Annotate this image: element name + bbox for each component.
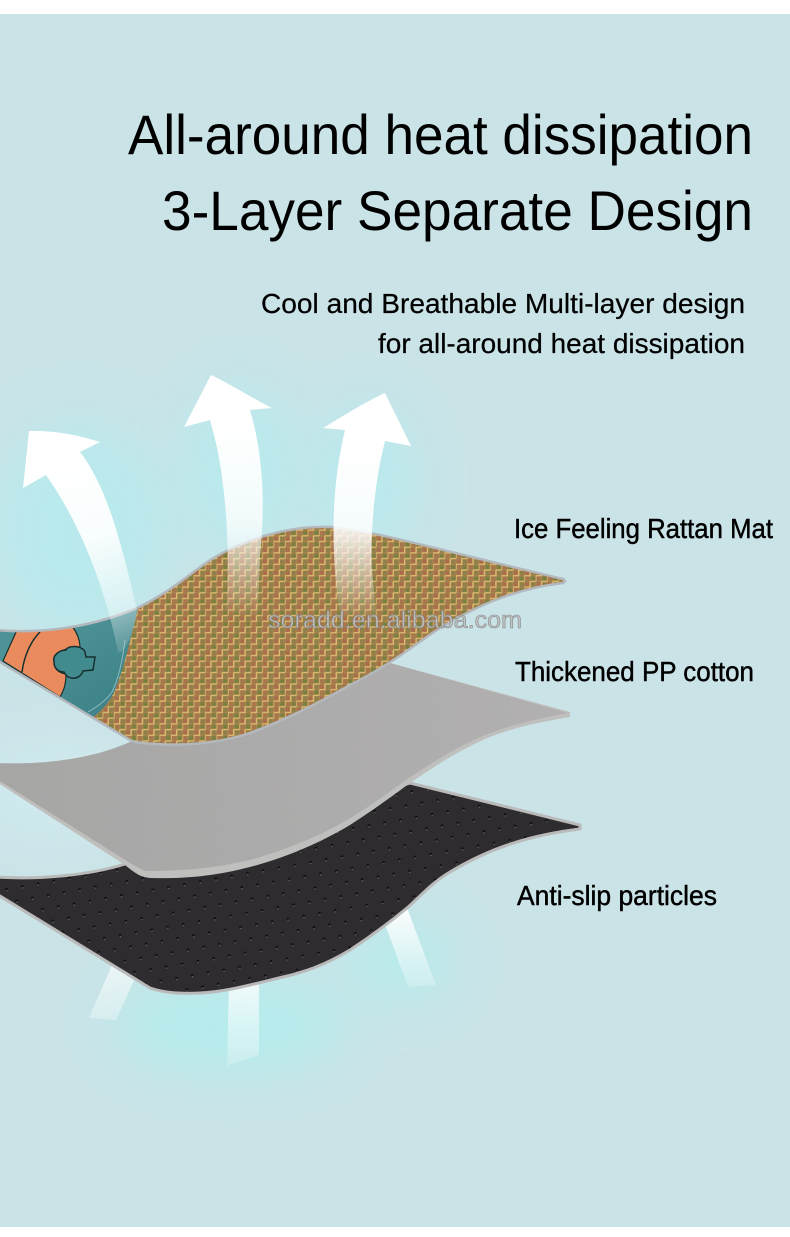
- rising heat arrow middle: [184, 375, 272, 615]
- lower escaping heat arrows: [89, 905, 436, 1066]
- title: 3-Layer Separate Design: [162, 180, 753, 242]
- teal cloud badge: [54, 646, 95, 678]
- rising heat arrow left: [23, 431, 137, 652]
- layer: thickened PP cotton: [0, 663, 570, 878]
- layer: ice feeling rattan mat: [0, 527, 565, 745]
- title: [128, 104, 753, 242]
- printed teal cartoon corner: [0, 609, 138, 717]
- rising heat arrow right: [323, 393, 411, 615]
- layer: anti-slip particles: [0, 783, 580, 993]
- subtitle: [261, 288, 745, 359]
- label: thickened PP cotton: Thickened PP cotton: [515, 656, 754, 687]
- watermark: soradd.en.alibaba.com: [268, 607, 522, 634]
- subtitle: for all-around heat dissipation: [378, 328, 745, 359]
- subtitle: Cool and Breathable Multi-layer design: [261, 288, 745, 319]
- orange character: [3, 626, 80, 697]
- label: anti-slip particles: Anti-slip particles: [517, 880, 717, 911]
- cyan glow behind arrows: [0, 380, 455, 1070]
- label: ice feeling rattan mat: Ice Feeling Rattan Mat: [514, 513, 773, 544]
- title: All-around heat dissipation: [128, 104, 753, 166]
